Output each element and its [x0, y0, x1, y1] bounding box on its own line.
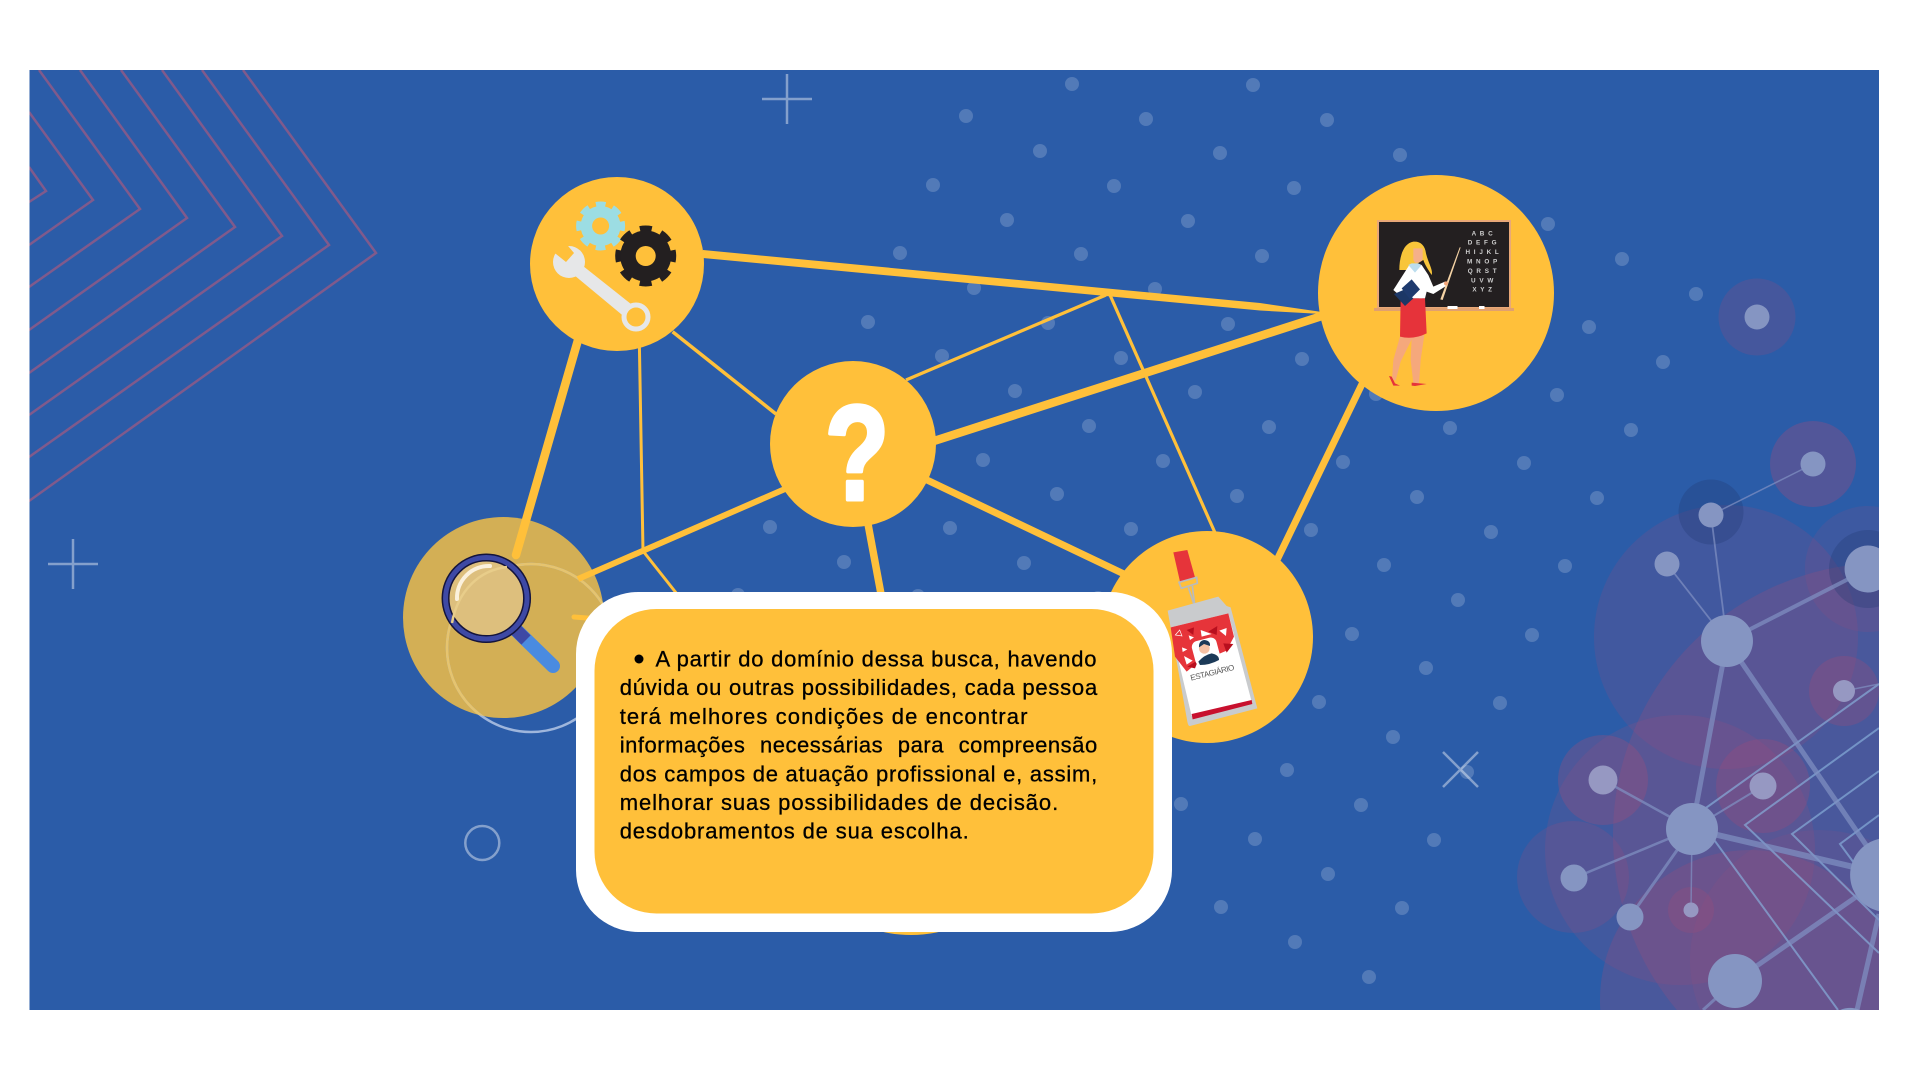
teacher figure: [1389, 242, 1461, 386]
magnifier node circle: [403, 517, 604, 718]
icon: question mark: ?: [825, 377, 889, 528]
teacher node: [1318, 175, 1554, 411]
badge node: [1101, 531, 1313, 743]
chevron line pattern: [29, 70, 376, 501]
card white frame: [576, 592, 1172, 932]
alphabet: [1465, 230, 1500, 294]
node circle: [530, 177, 704, 351]
thin ring below magnifier: [447, 564, 615, 732]
handle: [516, 630, 553, 666]
alphabet: X Y Z: [1472, 287, 1493, 294]
line: question to magnifier: [578, 489, 785, 579]
alphabet: M N O P: [1467, 259, 1498, 266]
stub at magnifier: [574, 617, 600, 619]
callout card: [576, 592, 1172, 932]
ring inside lens: [452, 567, 507, 623]
cluster edges: [1574, 464, 1879, 1010]
card text: informações necessárias para compreensão: [620, 733, 1097, 758]
lens: [445, 557, 527, 639]
icon: black gear: [619, 230, 672, 282]
line: question to teacher: [934, 316, 1322, 441]
card yellow panel: [594, 609, 1154, 914]
thin ring inside magnifier node: [446, 562, 603, 716]
label: ESTAGIÁRIO: ESTAGIÁRIO: [1189, 663, 1235, 683]
icon: intern badge: [1168, 550, 1257, 726]
blackboard: [1374, 221, 1514, 311]
line: question to badge: [927, 480, 1124, 574]
inner lens outline: [449, 561, 524, 636]
tools node: [530, 177, 704, 351]
card text: terá melhores condições de encontrar: [620, 704, 1027, 729]
decoration: ring: [465, 826, 499, 860]
lens highlight: [457, 566, 490, 599]
alphabet: A B C: [1472, 230, 1494, 237]
dot lattice: [731, 77, 1703, 984]
alphabet: Q R S T: [1468, 268, 1498, 275]
icon: blue gear: [580, 206, 621, 246]
card text: dos campos de atuação profissional e, assim,: [620, 761, 1097, 786]
line: tools to question: [673, 332, 776, 414]
icon: wrench: [551, 240, 648, 329]
line: question to bottom: [868, 524, 881, 594]
alphabet: U V W: [1471, 277, 1494, 284]
magnifier icon: [442, 554, 553, 666]
card text: melhorar suas possibilidades de decisão.: [620, 790, 1058, 815]
card text: dúvida ou outras possibilidades, cada pessoa: [620, 675, 1098, 700]
node circle: [770, 361, 936, 527]
cluster chevrons: [1696, 684, 1879, 1010]
lens outline: [442, 554, 530, 642]
node circle: [1318, 175, 1554, 411]
question node: [770, 361, 936, 528]
decoration: x mark: [1443, 752, 1478, 787]
cluster nodes: [1560, 304, 1879, 1010]
line: tools to teacher: [703, 250, 1322, 314]
cluster halos: [1517, 278, 1879, 1010]
line: tools to magnifier: [516, 340, 578, 555]
line: question to junction: [906, 295, 1106, 380]
alphabet: H I J K L: [1465, 249, 1500, 256]
line: tools down: [639, 346, 677, 594]
alphabet: D E F G: [1468, 240, 1498, 247]
decoration: plus left: [48, 539, 98, 589]
bottom hidden node: [781, 675, 1041, 935]
decoration: plus top: [762, 74, 812, 124]
line: junction to badge: [1110, 295, 1216, 535]
connector lines: [516, 250, 1363, 619]
node circle: [1101, 531, 1313, 743]
card text: desdobramentos de sua escolha.: [620, 819, 969, 844]
neck: [516, 630, 526, 640]
line: teacher to badge: [1277, 382, 1363, 560]
card text: A partir do domínio dessa busca, havendo: [656, 646, 1096, 672]
card text: [620, 646, 1098, 844]
network cluster at right: [1517, 278, 1879, 1010]
